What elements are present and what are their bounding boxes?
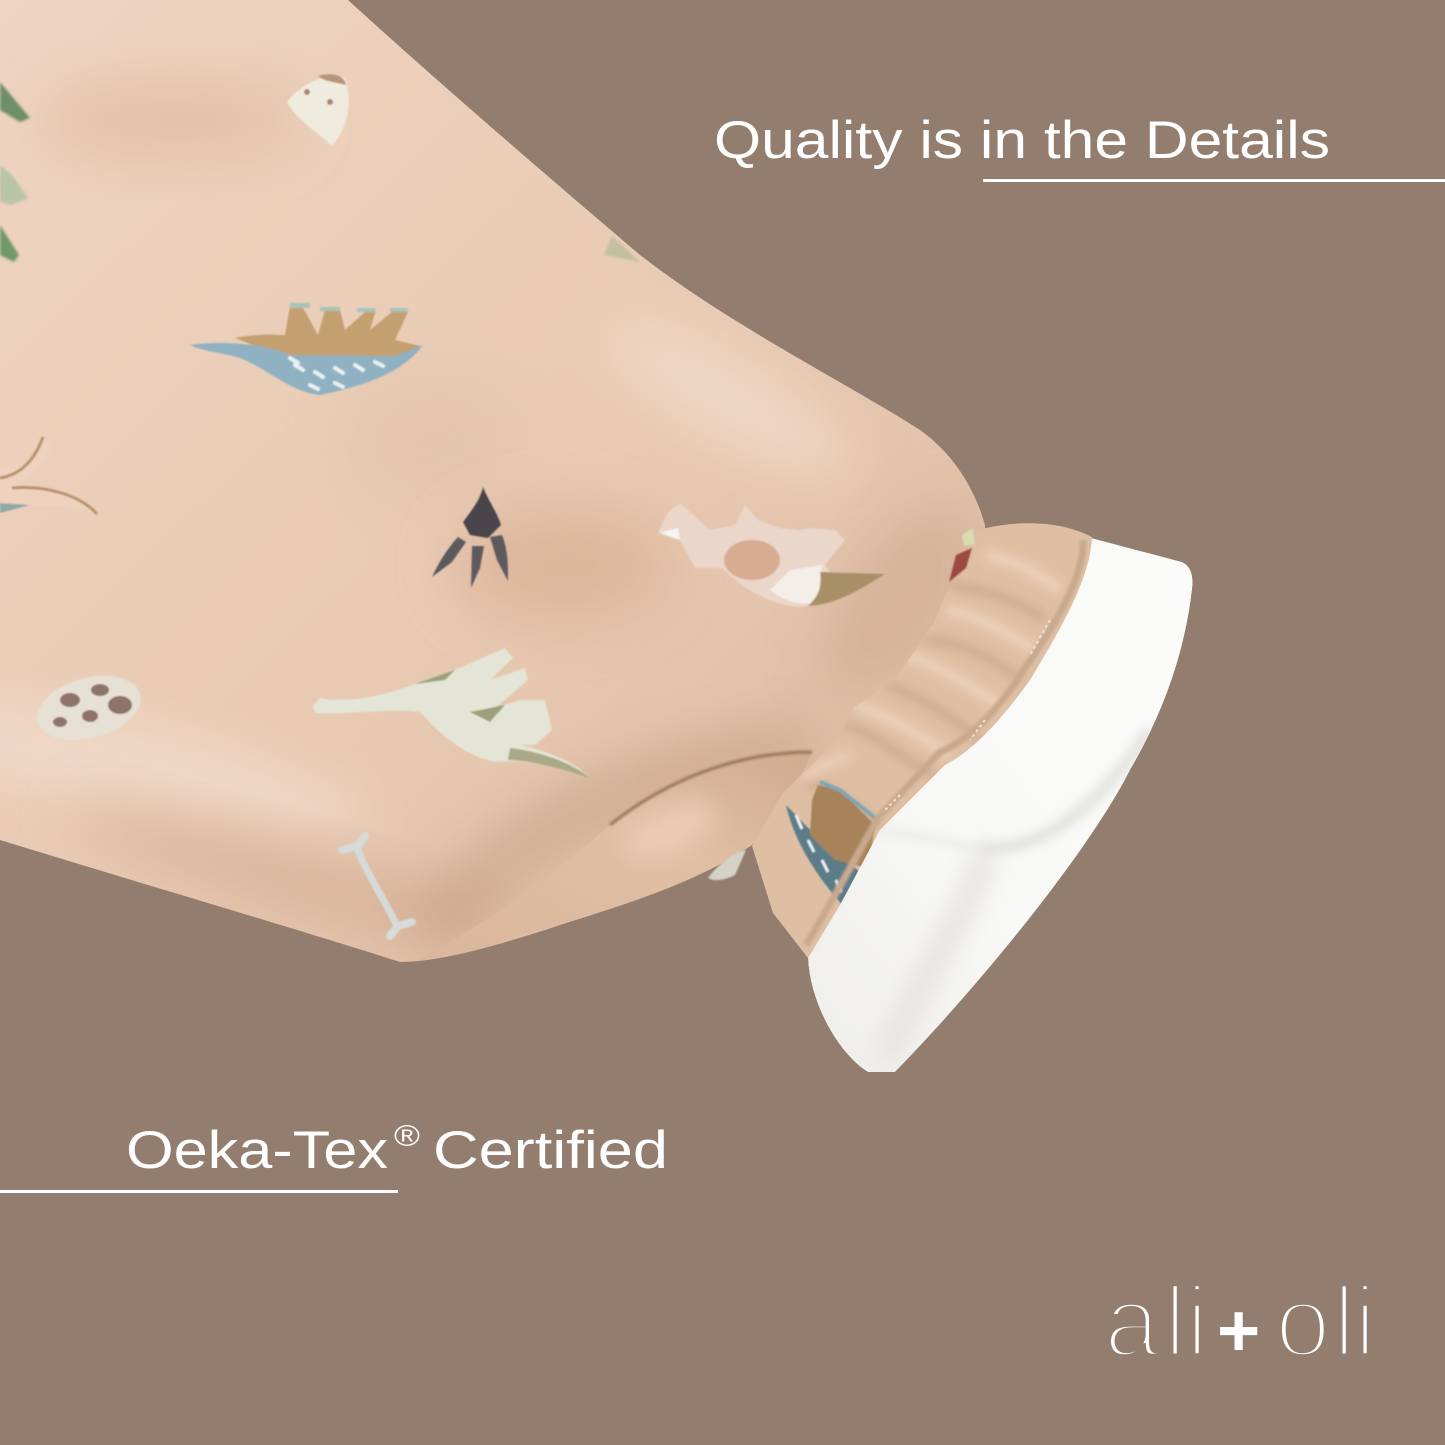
motif: sauropod xyxy=(313,648,590,778)
inner flap xyxy=(415,752,812,962)
motif: egg xyxy=(30,665,148,751)
white cuff xyxy=(808,535,1193,1072)
logo: + xyxy=(1217,1289,1260,1372)
motif: footprint xyxy=(432,487,508,588)
motif: dinosaur left xyxy=(0,437,97,514)
motif: dinosaur on cuff xyxy=(786,782,875,908)
label underline xyxy=(0,1190,398,1193)
motif: leaf xyxy=(604,236,640,262)
logo: oli xyxy=(1275,1266,1376,1378)
motif: triceratops xyxy=(658,503,885,607)
band seam xyxy=(806,540,1083,945)
label: Oeka-Tex xyxy=(126,1120,668,1180)
sleeve body xyxy=(0,0,985,962)
motif: bone xyxy=(342,836,412,936)
sleeve shading xyxy=(0,80,1004,979)
motif: egg top xyxy=(287,74,349,146)
motif: stegosaur dinosaur xyxy=(190,303,423,395)
cuff fold shadow xyxy=(980,730,1150,849)
logo xyxy=(1104,1266,1376,1378)
motif: partial dinosaur on flap xyxy=(708,850,746,880)
motif: flower detail xyxy=(949,528,975,582)
motif: plant xyxy=(0,82,30,262)
logo: ali xyxy=(1104,1266,1208,1378)
label: Oeka-Tex: ® xyxy=(394,1120,420,1153)
dark shadow above fold xyxy=(430,748,810,930)
label: Oeka-Tex: Certified xyxy=(433,1121,668,1180)
band pleats xyxy=(786,555,1060,908)
heading: quality: Quality is in the Details xyxy=(714,111,1330,170)
heading underline xyxy=(983,179,1445,182)
label: Oeka-Tex: Oeka-Tex xyxy=(126,1121,388,1180)
product photo: sleeve xyxy=(0,0,1193,1072)
elastic band xyxy=(752,523,1092,958)
